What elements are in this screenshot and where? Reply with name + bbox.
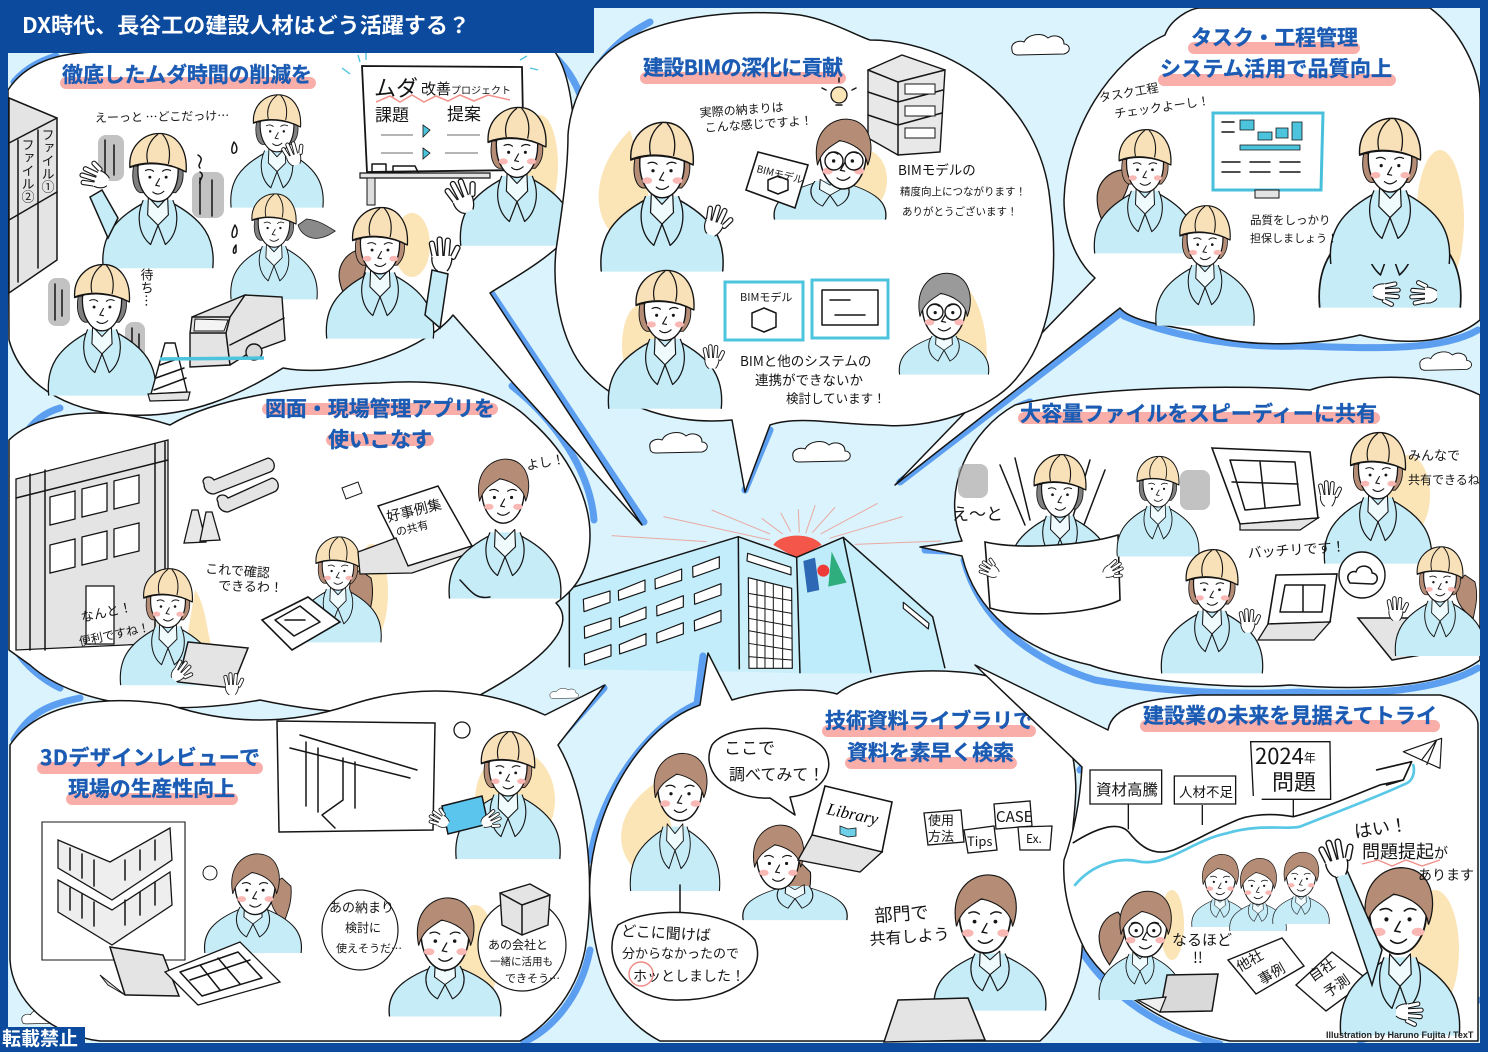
laptop with best practices (342, 482, 472, 574)
growth arrow chart (1073, 738, 1442, 885)
laptop with plans (1212, 448, 1318, 530)
presenter (442, 107, 574, 246)
speech bubble (975, 665, 1478, 1041)
man with glasses and tablet (746, 119, 887, 220)
grey worker (1117, 456, 1210, 556)
document cards: 方法 (928, 826, 954, 845)
laptop with best practices: の共有 (394, 516, 430, 540)
linking text: 連携ができないか (755, 369, 863, 389)
woman at laptop (743, 825, 847, 920)
speech: ensure quality: 担保しましょう！ (1250, 230, 1338, 246)
panel: cut wasted time (8, 52, 642, 525)
woman with glasses: なるほど (1172, 929, 1232, 950)
stacked pipes (203, 458, 278, 512)
box labels: 人材不足 (1179, 781, 1233, 801)
speech bubble: relieved: どこに聞けば (621, 920, 711, 946)
heading: タスク・工程管理 (1191, 22, 1358, 52)
panel: 3D design review (10, 685, 605, 1041)
ponytail worker (1093, 79, 1211, 253)
document cards: Ex. (1026, 830, 1042, 847)
speech bubble (895, 8, 1480, 485)
document cards (924, 801, 1052, 853)
woman with glasses: !! (1193, 947, 1203, 968)
heading: 資料を素早く検索 (847, 737, 1014, 767)
panel: technical library (590, 653, 1083, 1042)
panel: contribute to BIM (555, 13, 1054, 492)
speech: ensure quality: 品質をしっかり (1250, 212, 1330, 228)
heading: 3Dデザインレビューで (40, 742, 260, 772)
box labels: 資材高騰 (1096, 778, 1159, 800)
man raising hand (1317, 811, 1474, 1036)
3D building frame (42, 822, 185, 960)
whiteboard: 改善プロジェクト (421, 78, 511, 99)
worker thinking (389, 898, 501, 1016)
worker thumbs up: バッチリです！ (1247, 536, 1346, 563)
ponytail worker with tablet (205, 537, 388, 650)
panel: future of construction (975, 665, 1478, 1041)
heading (822, 705, 1036, 769)
file cabinet: ファイル① (38, 128, 58, 193)
thought: usable (322, 890, 402, 970)
paper: other company cases: 事例 (1254, 958, 1289, 989)
mentor man (621, 753, 720, 891)
monitor: BIM model (725, 282, 803, 340)
laptop: library: Library (824, 799, 880, 829)
heading (262, 393, 498, 454)
ponytail worker with tablet: これで確認 (205, 558, 271, 581)
whiteboard: 課題 (375, 101, 409, 126)
panel: task and process management (895, 8, 1480, 485)
woman pointing (599, 122, 737, 272)
logo (803, 552, 847, 593)
speech bubble: relieved: ホッとしました！ (633, 966, 745, 986)
worried worker pointing (77, 107, 229, 268)
laptop: library (798, 786, 892, 872)
worker sharing (1318, 433, 1480, 564)
worker sharing: みんなで (1408, 445, 1460, 464)
panel: drawing and site management apps (9, 382, 590, 712)
speech bubble (10, 685, 605, 1041)
thanks text: ありがとうございます！ (902, 204, 1018, 219)
box labels: 2024 (1255, 739, 1304, 771)
woman with ponytail (203, 854, 301, 953)
heading: システム活用で品質向上 (1160, 53, 1392, 83)
paper: own company forecast (1296, 952, 1368, 1011)
worker with tablet: 便利ですね！ (77, 618, 151, 650)
thanks text: BIMモデルの (898, 159, 976, 179)
black trend line (1073, 762, 1412, 852)
sun (773, 536, 822, 558)
speech bubble: check here: ここで (724, 734, 775, 759)
thought: share with company: できそう… (505, 970, 560, 986)
monitor: BIM model: BIMモデル (740, 289, 792, 305)
building faces (569, 537, 945, 673)
speech: looks like this: こんな感じですよ！ (704, 111, 813, 136)
file cabinet: ファイル② (18, 138, 38, 203)
paper: own company forecast: 自社 (1304, 954, 1339, 986)
traffic cone (148, 343, 264, 401)
ponytail worker peace sign (1387, 547, 1486, 656)
worried worker pointing: えーっと …どこだっけ… (95, 107, 229, 126)
heading (37, 742, 263, 805)
speech bubble (9, 382, 590, 712)
box labels: 問題 (1272, 765, 1316, 797)
paper: own company forecast: 予測 (1319, 970, 1354, 1002)
heading (1158, 22, 1396, 86)
thanks text (898, 159, 1026, 219)
heading: 図面・現場管理アプリを (265, 393, 495, 423)
linking text (740, 350, 886, 407)
thanks text: 精度向上につながります！ (900, 184, 1026, 199)
heading: 建設BIMの深化に貢献 (643, 52, 843, 82)
worker saying good: よし！ (524, 448, 566, 474)
large worker (1319, 118, 1464, 308)
thought: usable: 使えそうだ… (336, 940, 402, 956)
worker sharing: 共有できるね (1408, 471, 1480, 488)
worker with grey ponytail (231, 194, 335, 299)
box labels (1096, 739, 1316, 801)
whiteboard (342, 52, 538, 205)
speech: ensure quality (1250, 212, 1338, 246)
woman: share in department: 部門で (874, 898, 929, 928)
speech bubble: relieved: 分からなかったので (622, 943, 739, 962)
woman: share in department: 共有しよう (869, 920, 950, 950)
illustration credit: Illustration by Haruno Fujita / TexT (1326, 1030, 1474, 1040)
speech bubble: check here (709, 728, 829, 815)
file cabinet (9, 98, 58, 293)
man raising hand: はい！ (1352, 811, 1409, 844)
worker saying good (449, 448, 566, 599)
speech bubble: relieved (612, 885, 758, 1000)
BIM building (868, 55, 945, 155)
paper: other company cases: 他社 (1232, 945, 1267, 976)
heading: 使いこなす (328, 424, 432, 454)
speech bubble (555, 13, 1054, 492)
laptop with cloud sharing (1358, 618, 1450, 660)
panel: sharing large files (920, 377, 1486, 687)
box labels: 年 (1304, 749, 1316, 766)
three small coworkers (1192, 852, 1329, 931)
worker thumbs up (1161, 536, 1346, 673)
linking text: 検討しています！ (786, 388, 886, 407)
waiting worker (48, 265, 156, 396)
floor plan sheet (165, 942, 280, 1005)
central building with logo (569, 503, 945, 673)
stems (1128, 800, 1293, 829)
laptop with drawing (1258, 574, 1337, 640)
speech bubble (8, 52, 642, 525)
heading: 大容量ファイルをスピーディーに共有 (1020, 398, 1377, 428)
waiting worker: 待ち… (138, 268, 156, 307)
laptop on desk (100, 947, 179, 996)
heading: 徹底したムダ時間の削減を (62, 59, 312, 89)
waving worker (326, 208, 461, 339)
worker with tablet (77, 569, 248, 695)
worker with phone (426, 722, 560, 859)
no reproduction label: 転載禁止 (2, 1024, 78, 1051)
document cards: Tips (967, 831, 993, 850)
worker behind map: え〜と (952, 500, 1003, 525)
woman with glasses (1099, 890, 1232, 1012)
paper: other company cases (1228, 938, 1304, 994)
document cards: CASE (996, 806, 1032, 827)
speech bubble (590, 653, 1083, 1041)
linking text: BIMと他のシステムの (740, 350, 871, 370)
label boxes (1090, 770, 1236, 804)
thought: usable: あの納まり (329, 897, 394, 916)
speech bubble: check here: 調べてみて！ (729, 761, 824, 785)
monitor with schedule (1213, 113, 1323, 198)
ponytail worker with tablet: できるわ！ (218, 575, 283, 596)
thought: share with company: あの会社と (488, 936, 548, 953)
whiteboard: ムダ (374, 71, 418, 103)
heading: 現場の生産性向上 (68, 773, 235, 803)
thought: share with company: 一緒に活用も (490, 954, 553, 969)
monitor: other system (812, 280, 888, 338)
speech bubble (920, 377, 1480, 687)
man with glasses and tablet: BIMモデル (755, 160, 805, 186)
small worker (1156, 206, 1254, 326)
man raising hand: あります (1418, 865, 1474, 885)
worker with tablet: なんと！ (79, 597, 134, 626)
man raising hand: 問題提起が (1362, 838, 1448, 864)
worker thumbs up (608, 270, 725, 409)
older man with glasses (899, 273, 989, 375)
truck (190, 295, 285, 367)
title banner (0, 0, 594, 53)
laptop with best practices: 好事例集 (384, 494, 444, 527)
title banner: DX時代、長谷工の建設人材はどう活躍する？ (22, 9, 470, 40)
sun rays (612, 503, 942, 544)
ponytail worker: チェックよーし！ (1113, 92, 1211, 122)
thought: usable: 検討に (345, 919, 381, 936)
cloud icon (1339, 552, 1385, 598)
worker behind map (952, 455, 1128, 614)
heading: 建設業の未来を見据えてトライ (1143, 700, 1437, 730)
whiteboard: 提案 (447, 100, 481, 125)
heading: 技術資料ライブラリで (825, 705, 1034, 735)
paper plane (1403, 738, 1442, 768)
windows (583, 553, 929, 668)
cyan trend line (1075, 765, 1414, 885)
worker hand on cheek (231, 95, 323, 208)
cones (184, 510, 220, 543)
site building (16, 440, 168, 650)
speech: actual layout: 実際の納まりは (699, 98, 784, 121)
ponytail worker: タスク工程 (1098, 79, 1160, 106)
3D pipes frame (277, 721, 435, 832)
woman: share in department (869, 875, 1046, 1042)
document cards: 使用 (928, 810, 954, 829)
thought: share with company (478, 884, 566, 991)
lightbulb idea (822, 78, 856, 105)
